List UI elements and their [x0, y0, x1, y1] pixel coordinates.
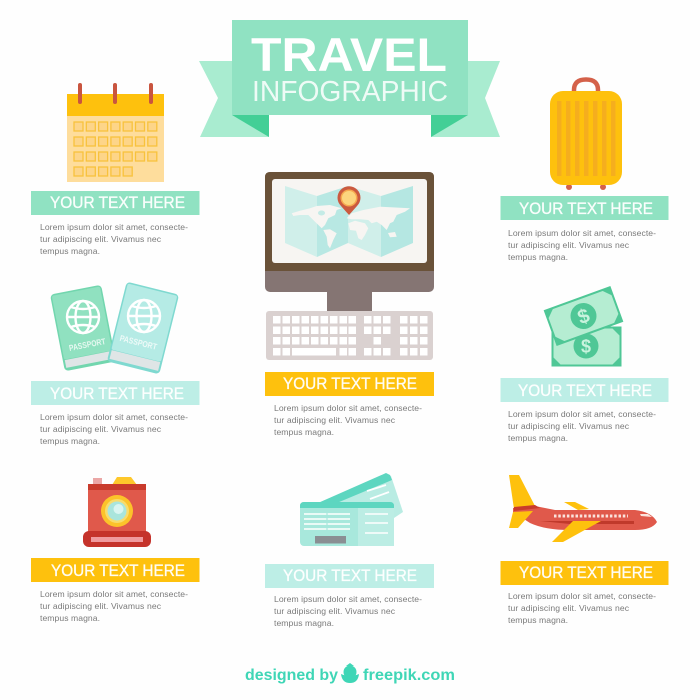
icon: computer with map: [265, 172, 434, 360]
panel: passports text: Lorem ipsum dolor sit amet, consecte-: [40, 412, 188, 422]
panel: calendar text: tur adipiscing elit. Vivamus nec: [40, 234, 162, 244]
teal globe: [128, 300, 160, 332]
panel: boarding passes text: YOUR TEXT HERE: [283, 567, 417, 585]
icon: banknotes: $: [581, 336, 591, 356]
title banner: [199, 20, 500, 137]
panel: suitcase text: tempus magna.: [508, 252, 568, 262]
panel: computer text: YOUR TEXT HERE: [283, 375, 417, 393]
panel: airplane text: YOUR TEXT HERE: [519, 564, 653, 582]
panel: computer text: tur adipiscing elit. Vivamus nec: [274, 415, 396, 425]
icon: airplane: [509, 475, 657, 542]
panel: boarding passes text: tur adipiscing elit. Vivamus nec: [274, 606, 396, 616]
panel: suitcase text: [500, 196, 668, 262]
panel: suitcase text: YOUR TEXT HERE: [519, 200, 653, 218]
panel: passports text: YOUR TEXT HERE: [50, 385, 184, 403]
icon: freepik mascot: [341, 663, 359, 683]
panel: camera text: YOUR TEXT HERE: [51, 562, 185, 580]
keyboard: [266, 311, 433, 360]
icon: banknotes: [545, 287, 622, 366]
panel: computer text: Lorem ipsum dolor sit amet, consecte-: [274, 403, 422, 413]
panel: computer text: tempus magna.: [274, 427, 334, 437]
panel: boarding passes text: Lorem ipsum dolor sit amet, consecte-: [274, 594, 422, 604]
panel: airplane text: tur adipiscing elit. Vivamus nec: [508, 603, 630, 613]
panel: passports text: tempus magna.: [40, 436, 100, 446]
icon: banknotes: $: [575, 305, 593, 329]
map: [285, 186, 413, 257]
panel: camera text: tempus magna.: [40, 613, 100, 623]
panel: camera text: Lorem ipsum dolor sit amet, consecte-: [40, 589, 188, 599]
panel: camera text: tur adipiscing elit. Vivamus nec: [40, 601, 162, 611]
panel: banknotes text: tur adipiscing elit. Vivamus nec: [508, 421, 630, 431]
map pin: [338, 186, 361, 215]
subtitle: infographic: INFOGRAPHIC: [252, 76, 448, 108]
panel: banknotes text: YOUR TEXT HERE: [518, 382, 652, 400]
icon: suitcase: [550, 80, 622, 190]
panel: calendar text: Lorem ipsum dolor sit amet, consecte-: [40, 222, 188, 232]
icon: boarding passes: [300, 473, 403, 546]
panel: passports text: tur adipiscing elit. Vivamus nec: [40, 424, 162, 434]
panel: airplane text: Lorem ipsum dolor sit amet, consecte-: [508, 591, 656, 601]
footer credit: freepik.com: [363, 667, 455, 684]
panel: calendar text: [31, 191, 200, 256]
panel: calendar text: YOUR TEXT HERE: [50, 194, 185, 212]
icon: passports: [50, 282, 179, 374]
panel: boarding passes text: tempus magna.: [274, 618, 334, 628]
panel: camera text: [31, 558, 200, 623]
title: travel: TRAVEL: [251, 28, 447, 81]
panel: passports text: [31, 381, 200, 446]
panel: calendar text: tempus magna.: [40, 246, 100, 256]
panel: computer text: [265, 372, 434, 437]
panel: airplane text: tempus magna.: [508, 615, 568, 625]
panel: banknotes text: tempus magna.: [508, 433, 568, 443]
footer credit: designed by: [245, 667, 338, 684]
icon: camera: [83, 477, 151, 547]
panel: banknotes text: Lorem ipsum dolor sit amet, consecte-: [508, 409, 656, 419]
panel: suitcase text: tur adipiscing elit. Vivamus nec: [508, 240, 630, 250]
teal passport: PASSPORT: [119, 333, 159, 352]
panel: suitcase text: Lorem ipsum dolor sit amet, consecte-: [508, 228, 656, 238]
green passport: PASSPORT: [68, 336, 107, 353]
footer credit: [245, 663, 455, 684]
green globe: [67, 301, 99, 333]
panel: airplane text: [500, 561, 668, 625]
icon: calendar: [67, 83, 164, 182]
panel: banknotes text: [500, 378, 668, 443]
panel: boarding passes text: [265, 564, 434, 628]
